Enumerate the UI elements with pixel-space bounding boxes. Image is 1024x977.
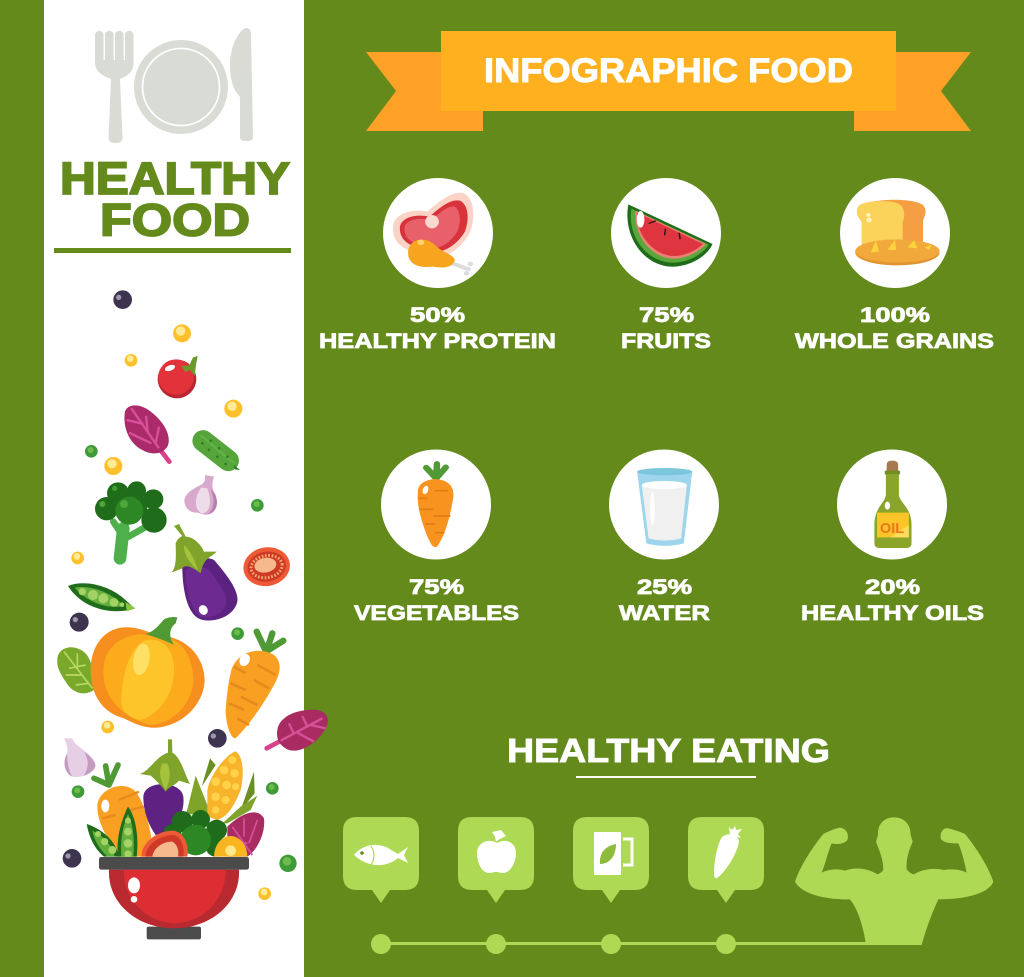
heading: healthy eating: HEALTHY EATING (507, 732, 830, 769)
label: 75% fruits (621, 304, 711, 353)
heading: healthy food: FOOD (100, 194, 250, 246)
label: 75% vegetables (354, 576, 519, 625)
berries and dots (70, 290, 264, 632)
heading: healthy food: HEALTHY (60, 153, 290, 204)
icon: glass of water (637, 468, 692, 546)
label: 100% whole grains (795, 304, 994, 353)
heading: healthy food (60, 153, 290, 246)
label: 20% healthy oils (801, 576, 984, 625)
label: 20% healthy oils: 20% (865, 576, 920, 599)
purple leaf (124, 405, 169, 462)
red bowl (99, 857, 249, 939)
label: 25% water: 25% (637, 576, 692, 599)
illustration: falling vegetables (68, 290, 293, 632)
icon: fish (354, 845, 408, 865)
icon: apple (477, 830, 516, 873)
label: 50% healthy protein: HEALTHY PROTEIN (319, 329, 556, 353)
pea pod (68, 583, 136, 611)
label: 100% whole grains: 100% (860, 304, 930, 327)
stat: 75% fruits (611, 178, 721, 288)
heading underline (576, 776, 756, 778)
label: 50% healthy protein (319, 304, 556, 353)
stat: 50% healthy protein (383, 178, 493, 288)
label: 25% water (619, 576, 711, 625)
garlic (184, 475, 217, 515)
bottle label text: OIL (880, 520, 904, 537)
label: 75% fruits: FRUITS (621, 329, 711, 353)
stat: 100% whole grains (840, 178, 950, 288)
bubble: fish (343, 817, 419, 903)
icon: mug with leaf (594, 832, 632, 875)
bowl contents (87, 739, 264, 858)
label: 75% vegetables: VEGETABLES (354, 601, 519, 625)
bubble: carrot (688, 817, 764, 903)
icon: carrot silhouette (714, 826, 742, 878)
pumpkin (91, 617, 205, 728)
label: 75% vegetables: 75% (409, 576, 464, 599)
carrot (226, 632, 283, 738)
icon: meat and drumstick (393, 193, 473, 276)
label: 20% healthy oils: HEALTHY OILS (801, 601, 984, 625)
eggplant (171, 524, 237, 620)
dots and berries (63, 613, 297, 900)
banner: infographic food (366, 31, 971, 131)
icon: oil bottle (874, 461, 912, 548)
label: 25% water: WATER (619, 601, 711, 625)
stat: 20% healthy oils (837, 450, 947, 560)
banner: infographic food: INFOGRAPHIC FOOD (484, 52, 853, 90)
illustration: pumpkin, carrot and bowl (57, 613, 328, 939)
tomato slice (240, 544, 293, 590)
icon: carrot (418, 464, 453, 547)
stat: 75% vegetables (381, 450, 491, 560)
label: 100% whole grains: WHOLE GRAINS (795, 329, 994, 353)
bubble: apple (458, 817, 534, 903)
heading underline (54, 248, 291, 253)
side leaf (57, 647, 94, 693)
icon: watermelon (627, 204, 713, 267)
timeline (371, 934, 871, 954)
icon: bread (855, 200, 939, 265)
tomato (158, 356, 198, 398)
broccoli (95, 481, 167, 558)
flying purple leaf (267, 710, 328, 751)
garlic (64, 738, 96, 777)
stat: 25% water (609, 450, 719, 560)
bubble: tea mug (573, 817, 649, 903)
label: 50% healthy protein: 50% (410, 304, 465, 327)
icon: plate and cutlery (95, 28, 253, 143)
panel: white sidebar (44, 0, 304, 977)
cucumber (188, 426, 243, 475)
icon: muscular man silhouette (795, 817, 993, 945)
label: 75% fruits: 75% (639, 304, 694, 327)
